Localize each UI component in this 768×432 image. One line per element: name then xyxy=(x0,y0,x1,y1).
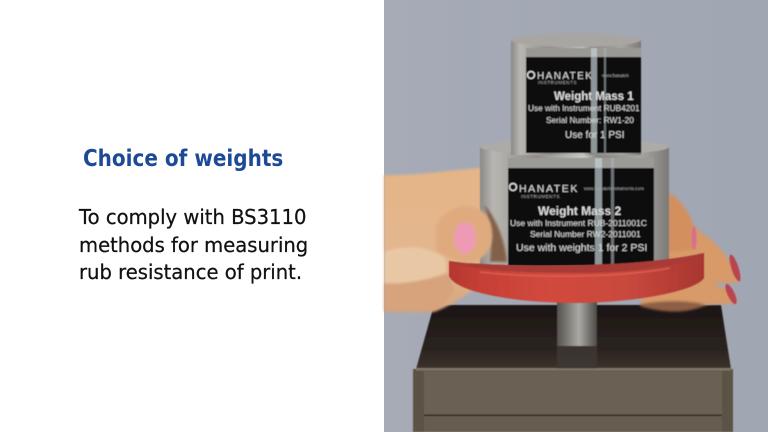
photo background xyxy=(384,0,768,432)
label text: weight mass 1: Use with Instrument RUB4201 xyxy=(528,103,640,113)
red base disc xyxy=(449,253,704,303)
lower weight cylinder xyxy=(480,139,669,268)
shadow between thumb and cylinder xyxy=(484,205,507,262)
stem xyxy=(557,300,597,368)
label text: weight mass 2: HANATEK xyxy=(519,183,579,195)
label text: weight mass 2: Serial Number RW2-2011001 xyxy=(530,229,641,239)
label text: weight mass 1: Serial Number: RW1-20 xyxy=(546,115,634,125)
label text: weight mass 2: Weight Mass 2 xyxy=(538,204,621,218)
label text: weight mass 1: www.hanatek xyxy=(602,73,630,78)
icon: pink thumbnail xyxy=(454,222,476,254)
thumb xyxy=(436,206,492,262)
label text: weight mass 1 xyxy=(528,71,640,141)
label text: weight mass 2: www.hanatekinstruments.com xyxy=(584,186,644,191)
text block: description: To comply with BS3110 xyxy=(79,205,306,229)
text block: description: methods for measuring xyxy=(79,232,308,256)
label text: weight mass 2: Use with weights 1 for 2 PSI xyxy=(516,242,647,254)
label text: weight mass 1: Weight Mass 1 xyxy=(554,91,634,103)
heading: choice of weights: Choice of weights xyxy=(83,146,283,172)
hand: left palm xyxy=(384,168,500,312)
hand: right fingers xyxy=(640,193,739,312)
text block: description xyxy=(78,205,308,284)
label text: weight mass 1: HANATEK xyxy=(537,71,593,82)
right fingernails xyxy=(692,226,743,305)
upper weight cylinder xyxy=(511,33,641,155)
text block: description: rub resistance of print. xyxy=(79,260,302,284)
label text: weight mass 1: INSTRUMENTS xyxy=(538,80,577,85)
label text: weight mass 2 xyxy=(510,183,647,254)
label text: weight mass 2: INSTRUMENTS xyxy=(521,194,560,199)
label text: weight mass 1: Use for 1 PSI xyxy=(565,130,624,141)
tester box xyxy=(413,305,733,432)
label text: weight mass 2: Use with Instrument RUB-2011001C xyxy=(510,218,647,228)
